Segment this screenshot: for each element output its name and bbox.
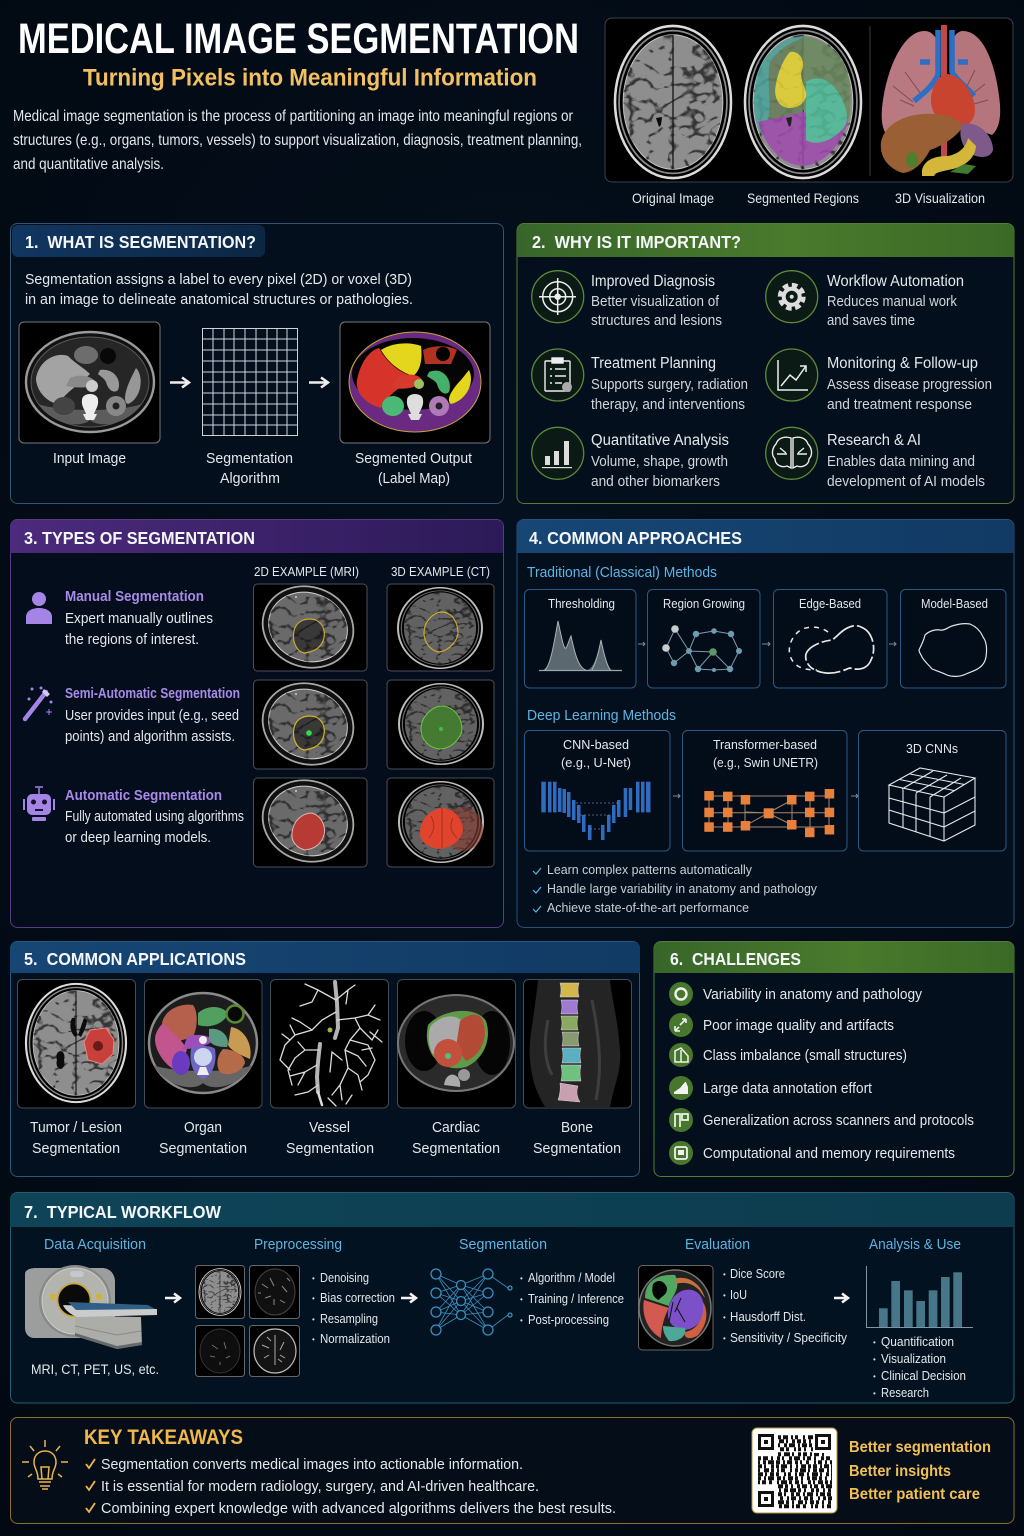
intro text: [13, 108, 582, 173]
image: evaluation: [638, 1266, 713, 1350]
preprocessing list: Resampling: [320, 1312, 378, 1326]
challenge list: Computational and memory requirements: [703, 1145, 955, 1162]
benefit list: Quantitative Analysis: [591, 432, 729, 449]
analysis list: •: [873, 1372, 876, 1381]
arrow: [165, 1294, 180, 1302]
preprocessing list: Denoising: [320, 1271, 369, 1285]
image: semi-auto 2D: [251, 671, 365, 777]
application captions: Segmentation: [32, 1141, 120, 1157]
icon: gear: [780, 285, 803, 308]
heading: section 5: [10, 942, 640, 973]
heading: section 2: 2. WHY IS IT IMPORTANT?: [532, 232, 741, 252]
benefit list: therapy, and interventions: [591, 397, 745, 413]
description: [25, 271, 413, 308]
slogans: Better segmentation: [849, 1439, 991, 1456]
image: tumor: [26, 984, 126, 1102]
icon: person: [26, 592, 52, 624]
diagram: transformer: [704, 789, 834, 837]
preprocessing list: •: [312, 1315, 315, 1324]
icon circles: [532, 271, 818, 479]
analysis list: •: [873, 1389, 876, 1398]
image: 3D organ visualization: [881, 25, 1000, 176]
description: Segmentation assigns a label to every pixel (2D) or voxel (3D): [25, 271, 412, 288]
challenge list: [703, 986, 974, 1162]
semi-automatic text: User provides input (e.g., seed: [65, 708, 239, 724]
segmentation list: Algorithm / Model: [528, 1271, 615, 1285]
image captions: Original Image: [632, 190, 714, 206]
analysis list: Visualization: [881, 1352, 946, 1366]
step headings: Evaluation: [685, 1237, 750, 1253]
segmentation list: •: [520, 1295, 523, 1304]
title: MEDICAL IMAGE SEGMENTATION: [18, 15, 579, 63]
semi-automatic text: Semi-Automatic Segmentation: [65, 686, 240, 702]
benefit list: Treatment Planning: [591, 355, 716, 372]
slogans: Better patient care: [849, 1486, 980, 1503]
analysis list: Quantification: [881, 1335, 954, 1349]
takeaway list: It is essential for modern radiology, surgery, and AI-driven healthcare.: [101, 1478, 539, 1495]
icon: robot: [23, 787, 55, 821]
challenge list: Poor image quality and artifacts: [703, 1017, 894, 1034]
semi-automatic text: [65, 686, 240, 745]
method labels: Transformer-based: [713, 737, 817, 752]
takeaway list: Segmentation converts medical images into actionable information.: [101, 1456, 523, 1473]
evaluation list: •: [723, 1313, 726, 1322]
intro text: Medical image segmentation is the process of partitioning an image into meaningful regions or: [13, 108, 574, 125]
evaluation list: •: [723, 1291, 726, 1300]
step headings: Preprocessing: [254, 1237, 342, 1253]
heading: section 5: 5. COMMON APPLICATIONS: [24, 949, 246, 969]
analysis list: Clinical Decision: [881, 1369, 966, 1383]
analysis list: Research: [881, 1386, 929, 1400]
analysis list: [873, 1335, 966, 1400]
step captions: Segmentation: [206, 451, 293, 467]
icon: neural network: [431, 1269, 512, 1335]
analysis list: •: [873, 1338, 876, 1347]
check list: Achieve state-of-the-art performance: [547, 901, 749, 915]
panel 7: typical workflow: [10, 1192, 1014, 1403]
example image frames: [254, 584, 494, 867]
benefit list: and treatment response: [827, 397, 972, 413]
application captions: Segmentation: [533, 1141, 621, 1157]
panel 4: common approaches: [517, 520, 1014, 928]
preprocessing list: [312, 1271, 395, 1346]
benefit list: Workflow Automation: [827, 273, 964, 290]
application captions: Cardiac: [432, 1120, 480, 1136]
evaluation list: Dice Score: [730, 1267, 785, 1281]
panel 6: challenges: [654, 942, 1014, 1176]
QR code: [752, 1428, 837, 1513]
method frames: [524, 590, 1006, 851]
heading: section 6: 6. CHALLENGES: [670, 949, 801, 969]
icon: bars: [542, 441, 572, 468]
icon: target: [539, 278, 576, 315]
evaluation list: [723, 1267, 848, 1345]
image: segmented output: [340, 322, 490, 443]
step captions: (Label Map): [378, 471, 450, 487]
preprocessing list: Bias correction: [320, 1291, 395, 1305]
method labels: (e.g., Swin UNETR): [713, 755, 818, 770]
heading: section 4: [517, 520, 1014, 553]
image: input CT: [19, 322, 160, 443]
method labels: Edge-Based: [799, 596, 861, 611]
column labels: 3D EXAMPLE (CT): [391, 564, 490, 579]
application frames: [18, 980, 632, 1108]
arrow: [401, 1294, 416, 1302]
check list: Learn complex patterns automatically: [547, 863, 753, 877]
preprocessing images: [196, 1266, 300, 1376]
method labels: CNN-based: [563, 737, 629, 752]
challenge icons: [669, 982, 693, 1165]
diagram: 3D CNN cube: [889, 768, 975, 841]
chart: analysis bars: [866, 1266, 973, 1328]
column labels: 2D EXAMPLE (MRI): [254, 564, 359, 579]
intro text: and quantitative analysis.: [13, 156, 164, 173]
image: spine: [530, 980, 620, 1107]
evaluation list: •: [723, 1334, 726, 1343]
evaluation list: IoU: [730, 1288, 747, 1302]
scanner caption: MRI, CT, PET, US, etc.: [31, 1361, 159, 1377]
benefit list: structures and lesions: [591, 313, 722, 329]
heading: key takeaways: KEY TAKEAWAYS: [84, 1426, 243, 1449]
method labels: 3D CNNs: [906, 741, 958, 756]
subheading: traditional: Traditional (Classical) Methods: [527, 565, 717, 581]
benefit list: Supports surgery, radiation: [591, 377, 748, 393]
benefit list: Monitoring & Follow-up: [827, 355, 978, 372]
preprocessing list: •: [312, 1294, 315, 1303]
application captions: Bone: [561, 1120, 593, 1136]
automatic text: Fully automated using algorithms: [65, 809, 244, 825]
application captions: Segmentation: [286, 1141, 374, 1157]
image: manual 2D: [251, 574, 365, 680]
arrow: [170, 378, 189, 388]
step headings: Data Acquisition: [44, 1237, 146, 1253]
application captions: Segmentation: [159, 1141, 247, 1157]
takeaway list: Combining expert knowledge with advanced algorithms delivers the best results.: [101, 1500, 616, 1517]
benefit list: Reduces manual work: [827, 294, 958, 310]
small flow arrows: [638, 642, 896, 798]
step captions: Input Image: [53, 451, 126, 467]
diagram: edge based: [789, 626, 874, 673]
step captions: Algorithm: [220, 471, 280, 487]
subheading: deep learning: Deep Learning Methods: [527, 708, 676, 724]
icon: scanner: [25, 1265, 157, 1349]
arrow: [309, 378, 328, 388]
intro text: structures (e.g., organs, tumors, vessels) to support visualization, diagnosis, treatment planning,: [13, 132, 582, 149]
hero image panel: [605, 18, 1013, 206]
automatic text: or deep learning models.: [65, 830, 211, 846]
image: original brain: [615, 26, 731, 178]
method labels: Model-Based: [921, 596, 988, 611]
application captions: Organ: [184, 1120, 222, 1136]
panel 2: why is it important: [517, 224, 1014, 504]
slogans: Better insights: [849, 1463, 951, 1480]
algorithm grid: [202, 328, 298, 436]
benefit list: and saves time: [827, 313, 915, 329]
heading: section 1: [12, 225, 265, 257]
application captions: [30, 1120, 621, 1157]
panel: key takeaways: [10, 1418, 1014, 1524]
benefit list: Research & AI: [827, 432, 921, 449]
challenge list: Class imbalance (small structures): [703, 1047, 907, 1064]
method labels: [548, 596, 988, 770]
manual segmentation text: the regions of interest.: [65, 632, 199, 648]
benefit list: [591, 273, 992, 490]
heading: section 7: [10, 1193, 1014, 1227]
segmentation list: •: [520, 1316, 523, 1325]
evaluation list: Sensitivity / Specificity: [730, 1331, 848, 1345]
chart: threshold histogram: [539, 621, 622, 670]
method labels: Thresholding: [548, 596, 615, 611]
icon: light bulb: [22, 1440, 68, 1489]
analysis list: •: [873, 1355, 876, 1364]
image: segmented brain: [745, 26, 861, 178]
heading: section 6: [654, 942, 1014, 973]
step headings: [44, 1237, 961, 1253]
image: manual 3D: [398, 588, 482, 668]
benefit list: Volume, shape, growth: [591, 454, 728, 470]
manual segmentation text: Expert manually outlines: [65, 611, 213, 627]
heading: section 3: [10, 520, 503, 553]
image: automatic 3D: [399, 782, 483, 862]
manual segmentation text: Manual Segmentation: [65, 589, 204, 605]
benefit list: Assess disease progression: [827, 377, 992, 393]
heading: section 1: 1. WHAT IS SEGMENTATION?: [25, 232, 256, 252]
application captions: Segmentation: [412, 1141, 500, 1157]
manual segmentation text: [65, 589, 213, 648]
application captions: Vessel: [309, 1120, 350, 1136]
image: semi-auto 3D: [399, 684, 483, 764]
subtitle: Turning Pixels into Meaningful Information: [83, 64, 537, 92]
challenge list: Variability in anatomy and pathology: [703, 986, 922, 1003]
slogans: [849, 1439, 991, 1503]
automatic text: [65, 788, 244, 846]
step headings: Analysis & Use: [869, 1237, 961, 1253]
heading: section 7: 7. TYPICAL WORKFLOW: [24, 1202, 221, 1222]
benefit list: and other biomarkers: [591, 474, 720, 490]
evaluation list: •: [723, 1270, 726, 1279]
segmentation list: Post-processing: [528, 1313, 609, 1327]
step captions: [53, 451, 472, 487]
diagram: region growing: [662, 625, 742, 672]
icon: line chart: [778, 360, 808, 390]
arrow: [834, 1294, 848, 1302]
image captions: 3D Visualization: [895, 190, 985, 206]
icon: brain: [772, 437, 812, 468]
heading: section 4: 4. COMMON APPROACHES: [529, 528, 742, 548]
check list: Handle large variability in anatomy and pathology: [547, 882, 818, 896]
column labels: [254, 564, 490, 579]
image: organ map: [149, 993, 257, 1093]
evaluation list: Hausdorff Dist.: [730, 1310, 806, 1324]
image: automatic 2D: [251, 768, 365, 874]
description: in an image to delineate anatomical structures or pathologies.: [25, 291, 413, 308]
heading: section 3: 3. TYPES OF SEGMENTATION: [24, 528, 255, 548]
diagram: U-Net: [541, 782, 650, 840]
automatic text: Automatic Segmentation: [65, 788, 222, 804]
semi-automatic text: points) and algorithm assists.: [65, 729, 235, 745]
benefit list: Improved Diagnosis: [591, 273, 715, 290]
header: [13, 15, 582, 173]
method labels: Region Growing: [663, 596, 745, 611]
benefit list: development of AI models: [827, 474, 985, 490]
benefit list: Enables data mining and: [827, 454, 975, 470]
challenge list: Large data annotation effort: [703, 1080, 873, 1097]
panel 5: common applications: [10, 942, 640, 1176]
image: cardiac: [398, 995, 514, 1091]
check list: [533, 863, 818, 915]
segmentation list: Training / Inference: [528, 1292, 624, 1306]
preprocessing list: Normalization: [320, 1332, 390, 1346]
icon: magic wand: [25, 686, 52, 719]
challenge list: Generalization across scanners and protocols: [703, 1112, 974, 1129]
preprocessing list: •: [312, 1274, 315, 1283]
step captions: Segmented Output: [355, 451, 472, 467]
image captions: Segmented Regions: [747, 190, 859, 206]
benefit list: Better visualization of: [591, 294, 720, 310]
image: vessels: [280, 982, 382, 1106]
takeaway list: [86, 1456, 616, 1517]
application captions: Tumor / Lesion: [30, 1120, 122, 1136]
panel 1: what is segmentation: [10, 224, 504, 504]
image captions: [632, 190, 985, 206]
panel 3: types of segmentation: [10, 520, 504, 928]
preprocessing list: •: [312, 1335, 315, 1344]
segmentation list: •: [520, 1274, 523, 1283]
step headings: Segmentation: [459, 1237, 547, 1253]
segmentation list: [520, 1271, 624, 1327]
diagram: model based: [919, 624, 987, 676]
method labels: (e.g., U-Net): [561, 755, 631, 770]
icon: clipboard: [545, 358, 572, 392]
heading: section 2: [517, 224, 1014, 257]
